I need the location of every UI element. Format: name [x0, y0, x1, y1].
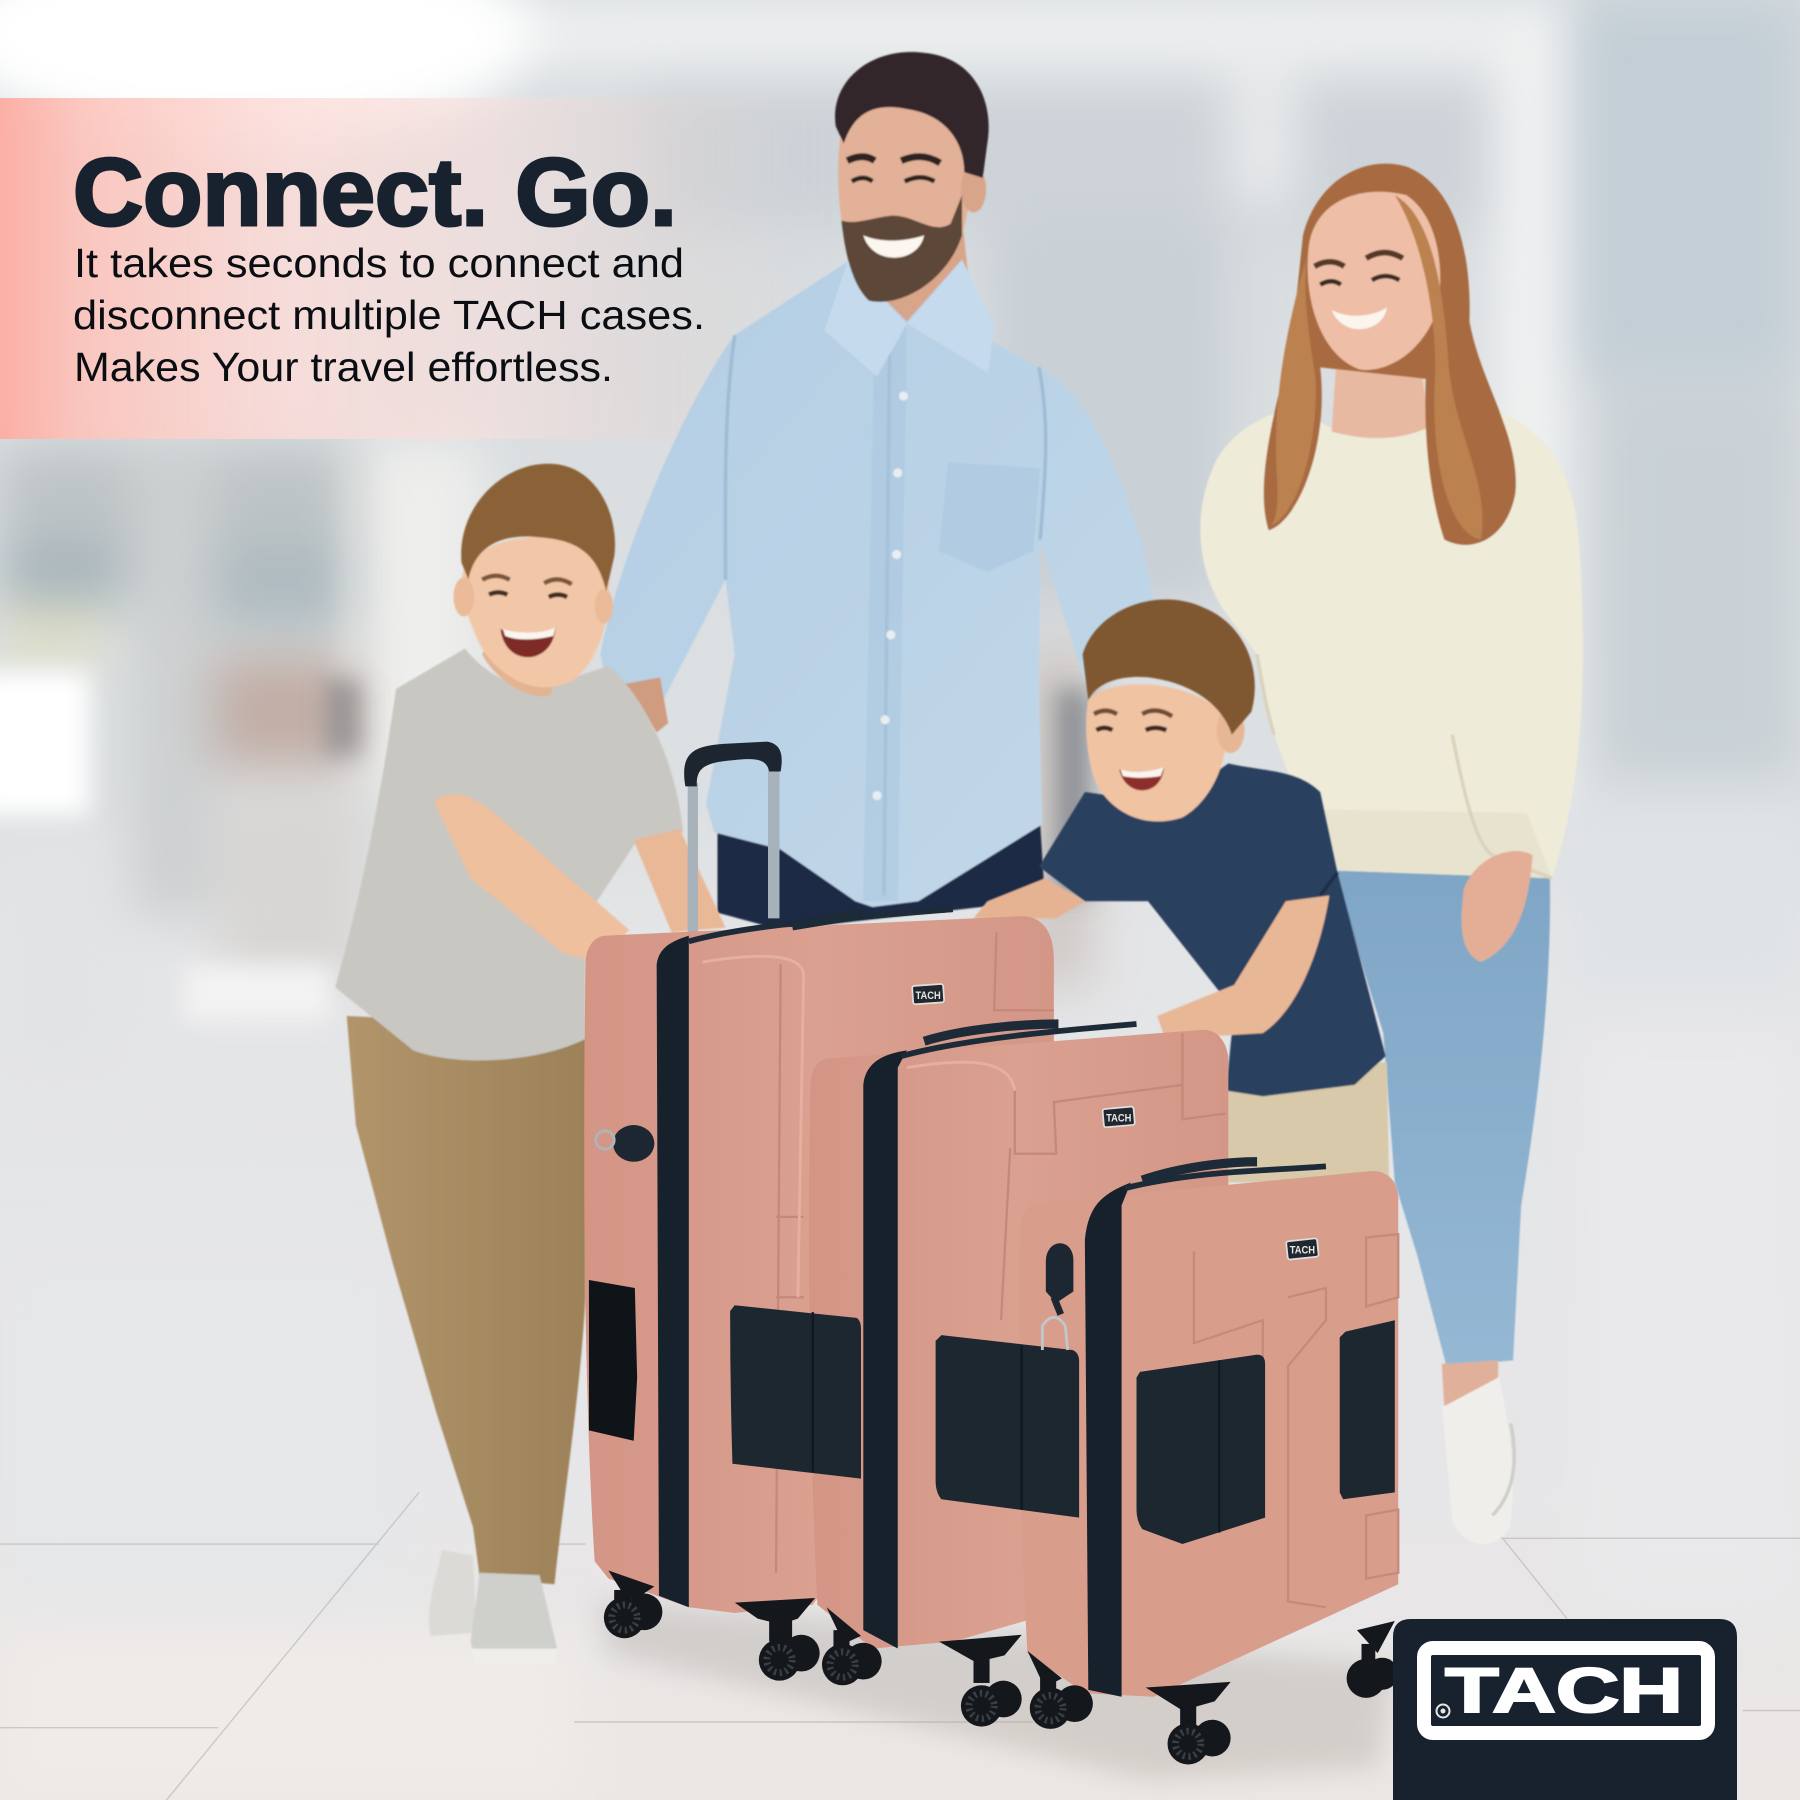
logo panel: [1393, 1619, 1737, 1800]
floor shadow: [597, 1601, 1395, 1779]
registered mark: [1436, 1704, 1450, 1718]
grey t-shirt: [335, 649, 683, 1060]
jeans: [1332, 867, 1550, 1366]
face: [838, 97, 972, 299]
logo tag: [912, 984, 944, 1004]
neck: [1332, 344, 1429, 438]
logo wordmark: TACH: [1445, 1656, 1683, 1726]
connector panel of medium case: [936, 1335, 1079, 1518]
beard: [841, 195, 962, 302]
neck: [852, 218, 970, 339]
person: father: [600, 52, 1154, 930]
person: younger boy: [974, 599, 1389, 1182]
panel: pink headline banner: [0, 98, 835, 439]
zipper band: [1085, 1182, 1131, 1697]
ear: [1217, 707, 1244, 753]
body text: [73, 240, 705, 390]
logo tag: [1102, 1106, 1135, 1127]
logo tag: TACH: [1290, 1245, 1315, 1257]
logo tag: [1286, 1238, 1319, 1260]
hair: [1083, 599, 1255, 735]
brown hair: [461, 464, 615, 591]
ear: [961, 166, 986, 212]
telescopic handle: [684, 742, 782, 932]
left arm: [974, 878, 1085, 918]
case shell: [584, 916, 1054, 1613]
person: older boy: [335, 464, 726, 1665]
case shell: [809, 1030, 1228, 1649]
large suitcase: [584, 742, 1054, 1681]
top strap: [689, 909, 953, 941]
medium suitcase: [730, 1024, 1228, 1727]
face: [1308, 192, 1440, 370]
eyes: [1094, 711, 1172, 716]
zipper band: [863, 1050, 907, 1649]
connector panel of large case: [730, 1305, 861, 1479]
eyes and brows: [1314, 253, 1403, 266]
blue shirt: [600, 259, 1154, 907]
wheels: [1027, 1621, 1398, 1764]
shirt buttons: [872, 391, 908, 800]
shell moulding: [776, 932, 1054, 1573]
mouth: [501, 627, 556, 657]
dark hair: [835, 52, 989, 178]
luggage set: [584, 742, 1398, 1779]
family photo illustration: [335, 52, 1583, 1779]
zipper band: [657, 936, 689, 1607]
panel seam: [1021, 1345, 1023, 1510]
left connector panel: [589, 1280, 637, 1441]
eyes: [482, 576, 572, 584]
beige shorts: [1226, 1062, 1389, 1182]
right connector panel: [1340, 1320, 1395, 1499]
floor tile lines: [0, 1492, 1800, 1800]
shell moulding: [1194, 1234, 1398, 1607]
placket: [863, 327, 907, 901]
smile: [1332, 308, 1387, 329]
body text: Makes Your travel effortless.: [74, 344, 613, 390]
luggage lock: [1042, 1243, 1073, 1350]
wheels: [604, 1570, 820, 1681]
top strap: [1125, 1162, 1326, 1188]
cream sweater: [1200, 404, 1583, 878]
father hand: [623, 677, 668, 732]
mouth: [863, 235, 924, 258]
navy t-shirt: [1039, 763, 1386, 1096]
shell moulding: [1001, 1033, 1226, 1320]
pocket: [939, 463, 1040, 572]
side ring tag: [596, 1125, 654, 1162]
ears: [453, 577, 474, 616]
right arm: [634, 829, 726, 932]
sneakers: [429, 1550, 476, 1636]
wheels: [822, 1607, 1022, 1727]
top strap: [901, 1024, 1137, 1056]
eyes and brows: [847, 157, 940, 163]
body text: It takes seconds to connect and: [74, 240, 684, 286]
body text: disconnect multiple TACH cases.: [73, 292, 705, 338]
mouth: [1119, 767, 1164, 790]
person: mother: [1200, 164, 1583, 1544]
panel seam: [812, 1312, 814, 1472]
ankle: [1442, 1360, 1498, 1406]
khaki pants: [347, 1016, 585, 1584]
centre connector panel: [1137, 1355, 1265, 1544]
case shell: [1019, 1171, 1398, 1697]
face: [462, 537, 609, 687]
collar: [824, 259, 994, 377]
logo tag: TACH: [916, 990, 941, 1002]
long hair: [1264, 164, 1516, 545]
logo tag: TACH: [1106, 1113, 1131, 1125]
white sneaker: [1442, 1374, 1513, 1544]
hair highlights: [1395, 195, 1482, 540]
face: [1086, 684, 1226, 821]
logo frame: [1424, 1648, 1708, 1733]
small suitcase: [936, 1162, 1398, 1764]
title: Connect. Go.: [73, 139, 677, 246]
hand: [1462, 851, 1533, 962]
neck: [482, 643, 557, 696]
navy trousers: [718, 804, 1045, 930]
left arm: [434, 794, 629, 962]
right arm: [1157, 895, 1329, 1039]
shirt shadow folds: [725, 335, 1046, 895]
